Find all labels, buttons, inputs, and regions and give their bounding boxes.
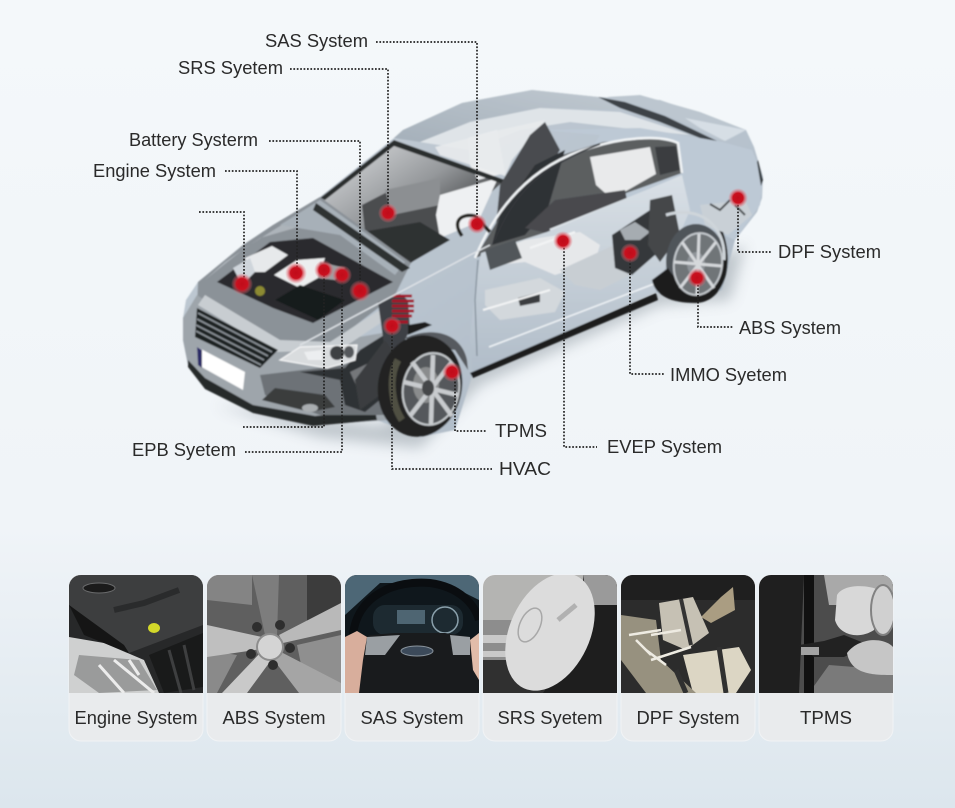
caption: SAS System bbox=[360, 707, 464, 728]
card: SAS System bbox=[345, 575, 479, 741]
label: IMMO Syetem: IMMO Syetem bbox=[670, 364, 787, 385]
caption: DPF System bbox=[636, 707, 740, 728]
hood surround bbox=[197, 197, 411, 350]
line: HVAC bbox=[392, 326, 492, 469]
line: DPF bbox=[738, 198, 771, 252]
photo: engine cover bbox=[69, 575, 203, 693]
card row bbox=[69, 559, 895, 741]
line: SAS bbox=[376, 42, 477, 224]
label: DPF System: DPF System bbox=[778, 241, 881, 262]
callout lines bbox=[199, 42, 771, 469]
card: SRS Syetem bbox=[483, 559, 617, 741]
label: SAS System: SAS System bbox=[265, 30, 368, 51]
label: HVAC: HVAC bbox=[499, 458, 551, 479]
engine bay bbox=[217, 238, 393, 323]
card: Engine System bbox=[69, 575, 203, 741]
license plate bbox=[197, 347, 245, 390]
underbody mechanicals bbox=[483, 195, 752, 320]
car illustration bbox=[183, 90, 763, 448]
line: ABS bbox=[698, 278, 733, 327]
caption: TPMS bbox=[800, 707, 852, 728]
line: TPMS bbox=[452, 372, 487, 431]
label: ABS System: ABS System bbox=[739, 317, 841, 338]
windshield base dark edge bbox=[313, 203, 410, 272]
bumper and front fascia bbox=[183, 295, 400, 426]
line: IMMO bbox=[630, 253, 664, 374]
red diagnostic dots bbox=[231, 188, 748, 382]
label: Engine System: Engine System bbox=[93, 160, 216, 181]
label: EPB Syetem: EPB Syetem bbox=[132, 439, 236, 460]
windshield and cabin bbox=[320, 120, 560, 263]
label: Battery Systerm: Battery Systerm bbox=[129, 129, 258, 150]
line: EVEP bbox=[564, 241, 597, 447]
line: EPB bbox=[245, 275, 342, 452]
rear quarter panel bbox=[540, 128, 763, 260]
card: DPF System bbox=[621, 575, 755, 741]
car body bbox=[183, 90, 763, 437]
line: Engine bbox=[225, 171, 297, 273]
line: left stub bbox=[199, 212, 244, 284]
photo: tyre pressure gauge bbox=[759, 575, 895, 693]
card: TPMS bbox=[759, 575, 895, 741]
label: EVEP System: EVEP System bbox=[607, 436, 722, 457]
lower door panel bbox=[470, 175, 690, 373]
photo: deployed airbag bbox=[483, 575, 617, 693]
front wheel bbox=[370, 328, 470, 444]
photo: alloy wheel and brake disc bbox=[207, 575, 341, 693]
caption: Engine System bbox=[74, 707, 198, 728]
callout labels bbox=[93, 30, 881, 479]
steering wheel bbox=[458, 215, 490, 236]
photo: steering wheel bbox=[345, 575, 479, 693]
ground shadow bbox=[215, 245, 745, 448]
caption: ABS System bbox=[222, 707, 326, 728]
front strut bbox=[355, 294, 432, 410]
line: Battery bbox=[269, 141, 360, 290]
caption: SRS Syetem bbox=[498, 707, 602, 728]
fender highlight line bbox=[300, 245, 490, 345]
card: ABS System bbox=[207, 575, 341, 741]
rear wheel bbox=[652, 212, 728, 303]
label: SRS Syetem: SRS Syetem bbox=[178, 57, 283, 78]
grille bbox=[195, 308, 278, 368]
line: SRS bbox=[290, 69, 388, 213]
label: TPMS: TPMS bbox=[495, 420, 547, 441]
side cabin cutaway bbox=[475, 138, 682, 258]
headlight bbox=[280, 345, 357, 368]
line: lower left stub bbox=[243, 270, 324, 427]
roof and rear deck bbox=[394, 90, 620, 142]
photo: particulate filters bbox=[621, 575, 755, 693]
